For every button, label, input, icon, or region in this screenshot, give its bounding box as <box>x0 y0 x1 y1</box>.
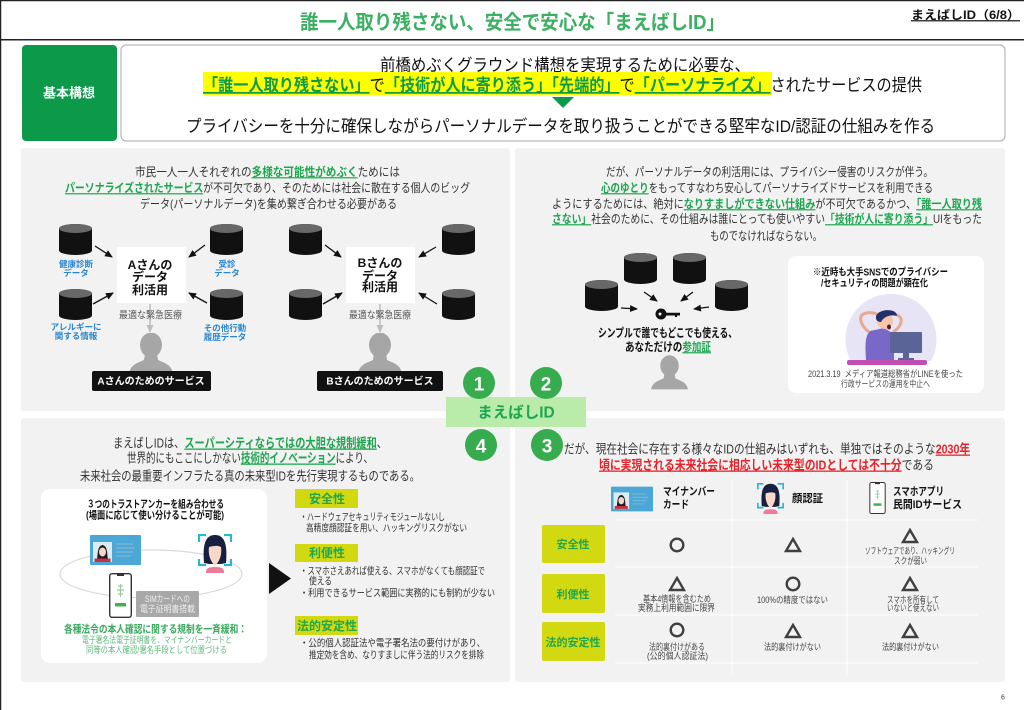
card: three trust anchors: 電子署名法電子証明書を、マイナンバーカードと <box>82 634 232 645</box>
panel 4: maebashi ID solution: まえばしIDは、スーパーシティならではの大胆な規制緩和、 <box>113 436 387 450</box>
diagram: A-san data use: その他行動 <box>204 323 247 333</box>
diagram: A-san data use: 関する情報 <box>55 331 98 341</box>
icon: face authentication <box>199 535 231 573</box>
row: security: 安全性 <box>556 537 590 551</box>
panel 2: privacy risk: ものでなければならない。 <box>710 229 822 243</box>
panel: basic concept statement: 前橋めぶくグラウンド構想を実現するために必要な、 <box>380 56 750 75</box>
diagram: B-san data use: 最適な緊急医療 <box>349 308 411 322</box>
diagram: A-san data use: アレルギーに <box>50 322 102 332</box>
benefit: legal stability: 法的安定性 <box>297 618 357 633</box>
column: My Number card: マイナンバー <box>663 485 715 498</box>
badge 4: 4 <box>476 437 487 458</box>
panel 2: privacy risk: ようにするためには、絶対になりすましができない仕組みが不可欠であるかつ、「誰一人取り残 <box>552 196 982 211</box>
diagram: A-san data use: データ <box>63 268 89 278</box>
badge 1: 1 <box>474 375 485 396</box>
benefit: legal stability <box>295 616 485 662</box>
card: three trust anchors: (場面に応じて使い分けることが可能) <box>86 509 224 522</box>
panel 2: privacy risk: さない」社会のために、その仕組みは誰にとっても使いやすい「技術が人に寄り添う」UIをもった <box>552 211 982 226</box>
panel 4: maebashi ID solution <box>21 418 510 682</box>
panel: basic concept statement: プライバシーを十分に確保しながらパーソナルデータを取り扱うことができる堅牢なID/認証の仕組みを作る <box>186 116 935 136</box>
panel 3: comparison of existing IDs <box>515 418 1005 682</box>
benefit: convenience <box>295 544 495 600</box>
icon: smartphone <box>110 574 131 617</box>
panel 4: maebashi ID solution: 世界的にもここにしかない技術的イノベーションにより、 <box>127 450 373 466</box>
arrow: leads to benefits <box>269 563 291 594</box>
column: My Number card: カード <box>663 498 689 511</box>
callout: SNS privacy problems: 2021.3.19 メディア報道総務省がLINEを使った <box>808 368 963 379</box>
row: security: スクが弱い <box>894 555 927 566</box>
diagram: A-san data use: 最適な緊急医療 <box>119 308 182 322</box>
benefit: security <box>295 489 467 534</box>
card: three trust anchors <box>41 489 267 663</box>
benefit: convenience: ・利用できるサービス範囲に実務的にも制約が少ない <box>300 586 495 600</box>
diagram: B-san data use: Bさんの <box>358 256 402 270</box>
callout: SNS privacy problems: /セキュリティの問題が顕在化 <box>821 276 928 290</box>
header rule <box>0 39 1024 40</box>
SIM certificate label: 電子証明書搭載 <box>140 603 195 614</box>
SIM certificate label <box>136 591 199 617</box>
diagram: A-san data use: 健康診断 <box>59 259 93 269</box>
callout: SNS privacy problems: 行政サービスの運用を中止へ <box>841 378 930 389</box>
benefit: convenience: 利便性 <box>309 545 345 560</box>
panel 2: privacy risk: だが、パーソナルデータの利活用には、プライバシー侵害のリスクが伴う。 <box>606 164 933 179</box>
diagram: A-san data use <box>50 224 247 391</box>
panel 1: personalised services: 市民一人一人それぞれの多様な可能性がめぶくためには <box>135 164 400 179</box>
diagram: A-san data use: 受診 <box>218 259 236 269</box>
callout: SNS privacy problems: ※近時も大手SNSでのプライバシー <box>813 266 948 278</box>
row: legal stability: (公的個人認証法) <box>647 650 708 661</box>
callout: SNS privacy problems <box>788 256 984 393</box>
column: face authentication: 顔認証 <box>792 491 823 505</box>
row: legal stability: 法的安定性 <box>546 635 600 649</box>
panel 2: privacy risk <box>515 148 1005 411</box>
center hub: maebashi ID with numbered badges: まえばしID <box>477 403 555 421</box>
icon: ID card <box>90 535 141 565</box>
panel 2: privacy risk: 心のゆとりをもってすなわち安心してパーソナライズドサービスを利用できる <box>601 180 933 195</box>
row: convenience <box>542 574 939 613</box>
page tag: まえばしID（6/8） <box>911 7 1020 22</box>
title: 誰一人取り残さない、安全で安心な「まえばしID」 <box>300 10 725 34</box>
benefit: convenience: 使える <box>309 574 332 588</box>
diagram: B-san data use <box>289 224 475 391</box>
panel: basic concept label <box>22 45 117 141</box>
icon: stressed man at computer <box>845 294 936 365</box>
card: three trust anchors: ３つのトラストアンカーを組み合わせる <box>87 498 224 511</box>
row: security <box>542 525 955 566</box>
row: convenience: 基本4情報を含むため <box>643 593 711 604</box>
row: legal stability: 法的裏付けがない <box>764 641 821 652</box>
benefit: security: ・ハードウェアセキュリティモジュールないし <box>300 512 445 524</box>
diagram: key and databases: シンプルで誰でもどこでも使える、 <box>598 325 737 340</box>
row: convenience: スマホを所有して <box>887 594 939 605</box>
benefit: legal stability: 推定効を含め、なりすましに伴う法的リスクを排除 <box>309 648 484 662</box>
center hub: maebashi ID with numbered badges <box>446 367 586 461</box>
card: three trust anchors: 同等の本人確認/署名手段として位置づける <box>86 644 227 655</box>
panel 1: personalised services: パーソナライズされたサービスが不可欠であり、そのためには社会に散在する個人のビッグ <box>65 180 470 195</box>
row: legal stability: 法的裏付けがある <box>649 641 705 652</box>
SIM certificate label: SIMカードへの <box>145 594 190 604</box>
row: security: ソフトウェアであり、ハッキングリ <box>865 545 955 556</box>
row: legal stability: 法的裏付けがない <box>882 641 939 652</box>
diagram: A-san data use: データ <box>132 269 168 284</box>
panel 3: comparison of existing IDs: 頃に実現される未来社会に相応しい未来型のIDとしては不十分である <box>599 458 934 472</box>
diagram: A-san data use: データ <box>214 268 240 278</box>
row: convenience: 利便性 <box>556 587 590 601</box>
row: convenience: 100%の精度ではない <box>757 594 828 605</box>
diagram: key and databases <box>585 253 748 389</box>
benefit: convenience: ・スマホさえあれば使える、スマホがなくても顔認証で <box>300 564 485 578</box>
panel: basic concept label: 基本構想 <box>43 86 95 100</box>
diagram: A-san data use: Aさんのためのサービス <box>97 374 205 388</box>
diagram: A-san data use: 利活用 <box>132 282 168 297</box>
benefit: legal stability: ・公的個人認証法や電子署名法の要付けがあり、 <box>300 636 485 650</box>
row: convenience: いないと使えない <box>887 602 939 613</box>
column: smartphone app <box>870 482 962 514</box>
column: face authentication <box>758 484 823 514</box>
panel 1: personalised services: データ(パーソナルデータ)を集め繋ぎ合わせる必要がある <box>140 196 397 211</box>
comparison table grid <box>615 480 978 675</box>
panel 4: maebashi ID solution: 未来社会の最重要インフラたる真の未来型IDを先行実現するものである。 <box>80 468 420 484</box>
badge 2: 2 <box>541 375 551 396</box>
badge 3: 3 <box>542 437 552 458</box>
diagram: B-san data use: データ <box>362 268 398 283</box>
column: smartphone app: スマホアプリ <box>893 485 944 498</box>
panel: basic concept statement: 「誰一人取り残さない」で「技術が人に寄り添う」「先端的」で「パーソナライズ」されたサービスの提供 <box>203 75 922 95</box>
diagram: key and databases: あなただけの参加証 <box>625 339 711 354</box>
benefit: security: 安全性 <box>309 491 345 506</box>
panel: basic concept statement <box>121 45 1005 141</box>
diagram: A-san data use: 履歴データ <box>204 332 246 342</box>
diagram: B-san data use: Bさんのためのサービス <box>326 374 434 388</box>
column: My Number card <box>611 485 715 511</box>
diagram: B-san data use: 利活用 <box>362 279 398 294</box>
panel 1: personalised services <box>21 148 510 411</box>
card: three trust anchors: 各種法令の本人確認に関する規制を一斉緩和： <box>64 623 247 636</box>
panel 3: comparison of existing IDs: だが、現在社会に存在する様々なIDの仕組みはいずれも、単独ではそのような2030年 <box>564 442 970 456</box>
row: convenience: 実務上利用範囲に限界 <box>638 602 715 613</box>
diagram: A-san data use: Aさんの <box>128 258 172 272</box>
row: legal stability <box>542 622 939 661</box>
page number: 6 <box>1001 694 1005 702</box>
column: smartphone app: 民間IDサービス <box>893 497 962 511</box>
benefit: security: 高精度顔認証を用い、ハッキングリスクがない <box>306 522 467 534</box>
